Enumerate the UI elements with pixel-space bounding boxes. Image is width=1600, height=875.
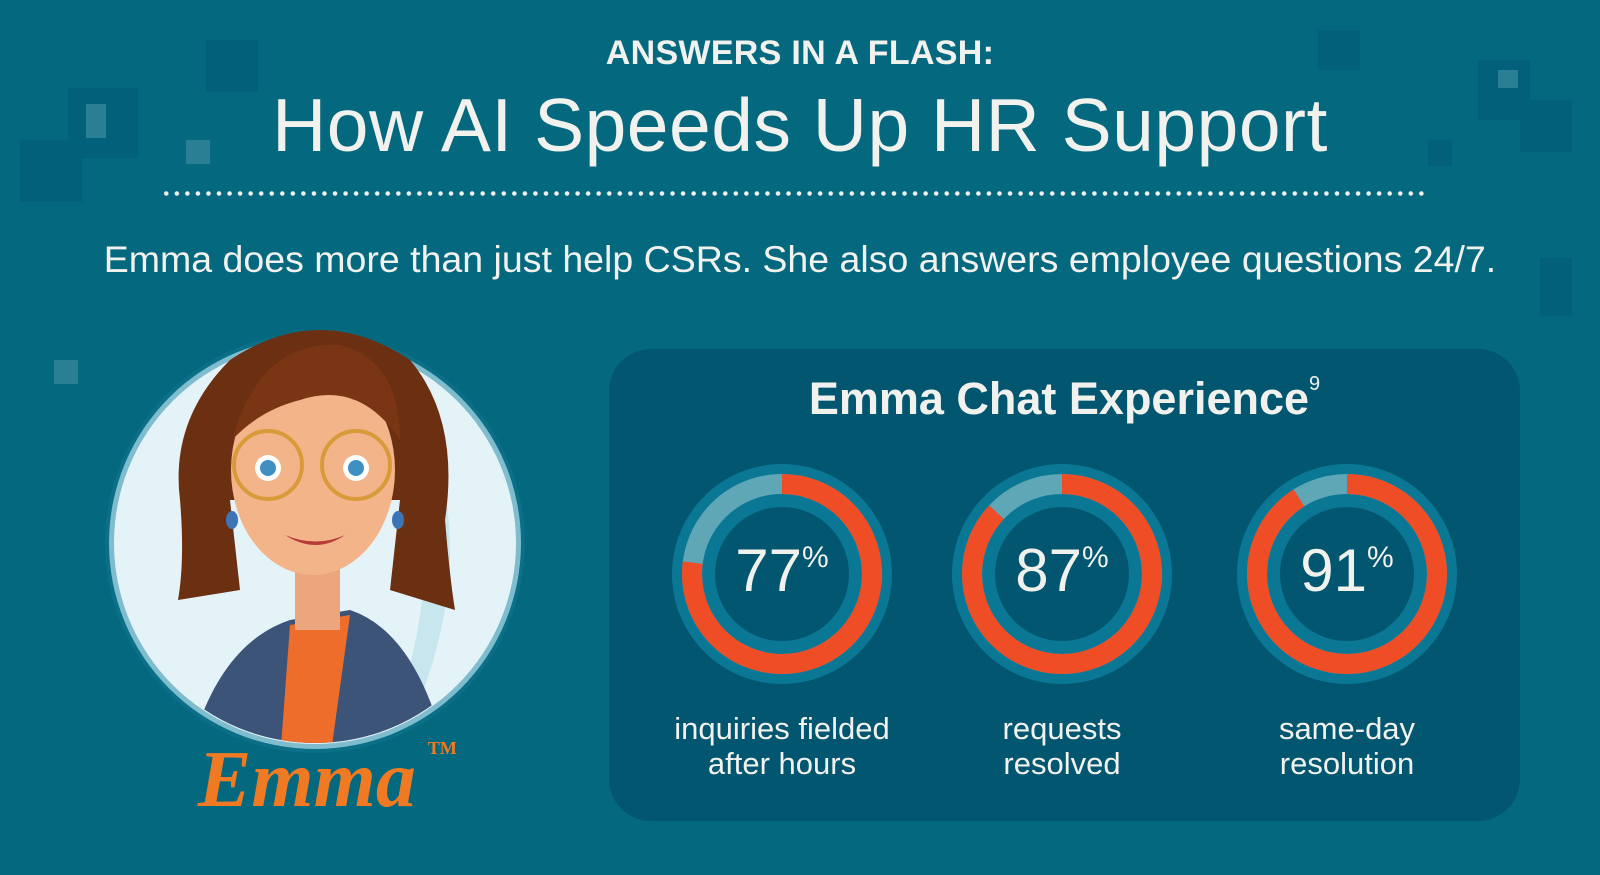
dotted divider — [161, 191, 1427, 196]
avatar: Emma — [105, 330, 525, 753]
label: same-day resolution — [1279, 711, 1415, 781]
panel: Emma Chat Experience — [609, 349, 1520, 821]
donut chart: 91%: 91% — [1300, 537, 1394, 604]
donut chart: 91% — [1237, 464, 1457, 684]
label: inquiries fielded after hours: after hours — [708, 746, 856, 781]
label: same-day resolution: resolution — [1280, 746, 1414, 781]
donut chart: 77%: 77% — [735, 537, 829, 604]
label: requests resolved: requests — [1003, 711, 1121, 746]
label: inquiries fielded after hours — [674, 711, 890, 781]
donut chart: 87%: 87% — [1015, 537, 1109, 604]
tagline: Emma does more than just help CSRs. She also answers employee questions 24/7. — [104, 238, 1496, 280]
logo: Emma: Emma TM — [198, 736, 457, 824]
label: requests resolved: resolved — [1003, 746, 1121, 781]
label: requests resolved — [1003, 711, 1121, 781]
panel heading: Emma Chat Experience9 — [809, 373, 1320, 424]
label: same-day resolution: same-day — [1279, 711, 1415, 746]
donut chart: 87% — [952, 464, 1172, 684]
subtitle: ANSWERS IN A FLASH: — [606, 34, 994, 72]
label: inquiries fielded after hours: inquiries fielded — [674, 711, 890, 746]
donut chart: 77% — [672, 464, 892, 684]
title: How AI Speeds Up HR Support — [272, 83, 1328, 167]
